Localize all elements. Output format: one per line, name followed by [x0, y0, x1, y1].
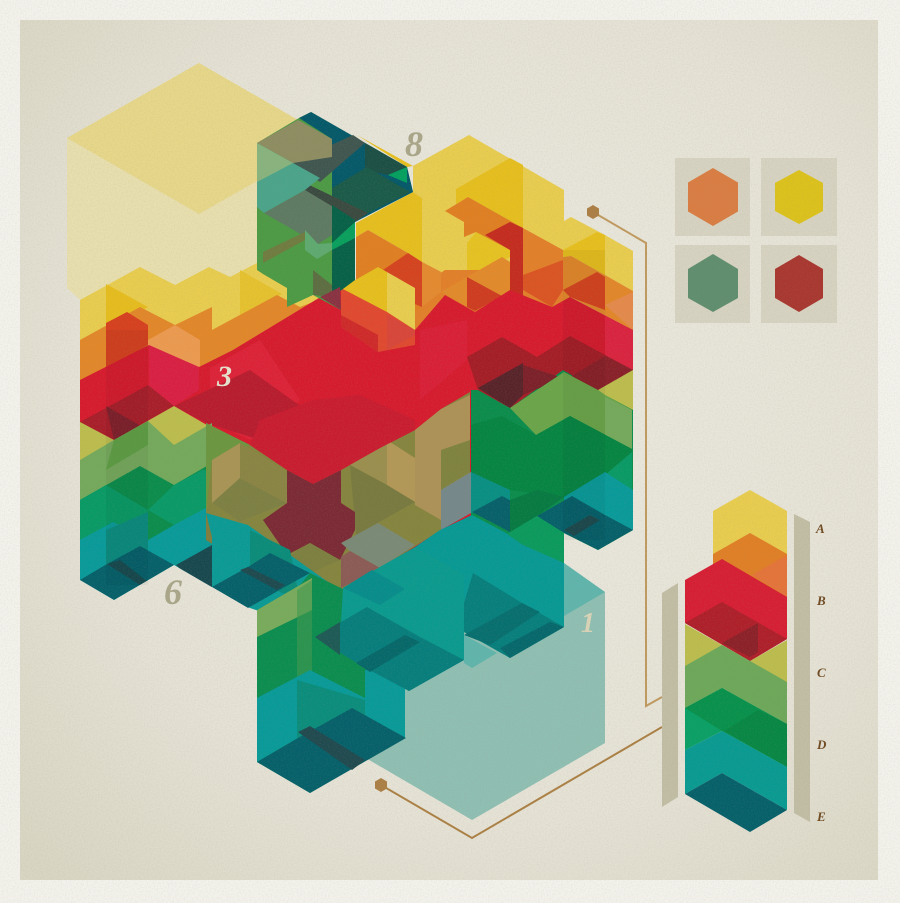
legend letters: D	[816, 737, 827, 752]
mid green wedge	[106, 421, 148, 470]
brown centre backdrop	[206, 392, 470, 592]
green band left	[80, 466, 206, 540]
yellow band: right	[356, 135, 633, 292]
copper lines	[375, 205, 662, 838]
yellow small hexagon with red shadow	[341, 267, 415, 352]
thin yellow strip behind dark box	[357, 135, 413, 167]
dark red shadows	[80, 336, 633, 440]
maroon centre stem	[263, 470, 355, 560]
legend stacked column	[685, 490, 787, 832]
teal centre stack	[315, 547, 464, 691]
dark teal band left	[80, 546, 174, 600]
green teal band left	[80, 485, 148, 545]
numeral 6: 6	[164, 572, 182, 612]
green band right	[471, 370, 633, 560]
numeral 1: 1	[581, 608, 595, 639]
bottom left stack	[257, 573, 406, 793]
legend letters: C	[817, 665, 826, 680]
green base behind red, right	[478, 370, 633, 550]
legend letters: E	[816, 809, 826, 824]
legend letters: A	[815, 521, 825, 536]
orange band	[80, 197, 633, 390]
large pale yellow hexagon	[67, 63, 331, 300]
grey translucent patches	[206, 472, 471, 600]
pale overlay dark vertical strips	[106, 250, 605, 585]
large pale teal hexagon	[340, 515, 605, 820]
light green band left	[80, 421, 212, 500]
yellow band: left	[80, 263, 319, 340]
olive band left	[80, 406, 206, 460]
main stacked hexagon body	[80, 135, 633, 625]
teal band right	[471, 472, 633, 570]
legend letters	[815, 521, 827, 824]
teal band left	[80, 508, 212, 600]
red centre overlay	[250, 395, 415, 484]
numeral 3: 3	[216, 360, 232, 393]
dark green column box	[257, 112, 413, 310]
small pale teal overlap	[464, 635, 497, 668]
legend side bars	[662, 514, 810, 822]
colour key swatches	[675, 158, 837, 323]
numeral 8: 8	[405, 124, 423, 164]
teal right stack	[415, 515, 564, 658]
legend letters: B	[816, 593, 826, 608]
left lower teal stack	[206, 513, 328, 610]
red band	[80, 222, 633, 560]
